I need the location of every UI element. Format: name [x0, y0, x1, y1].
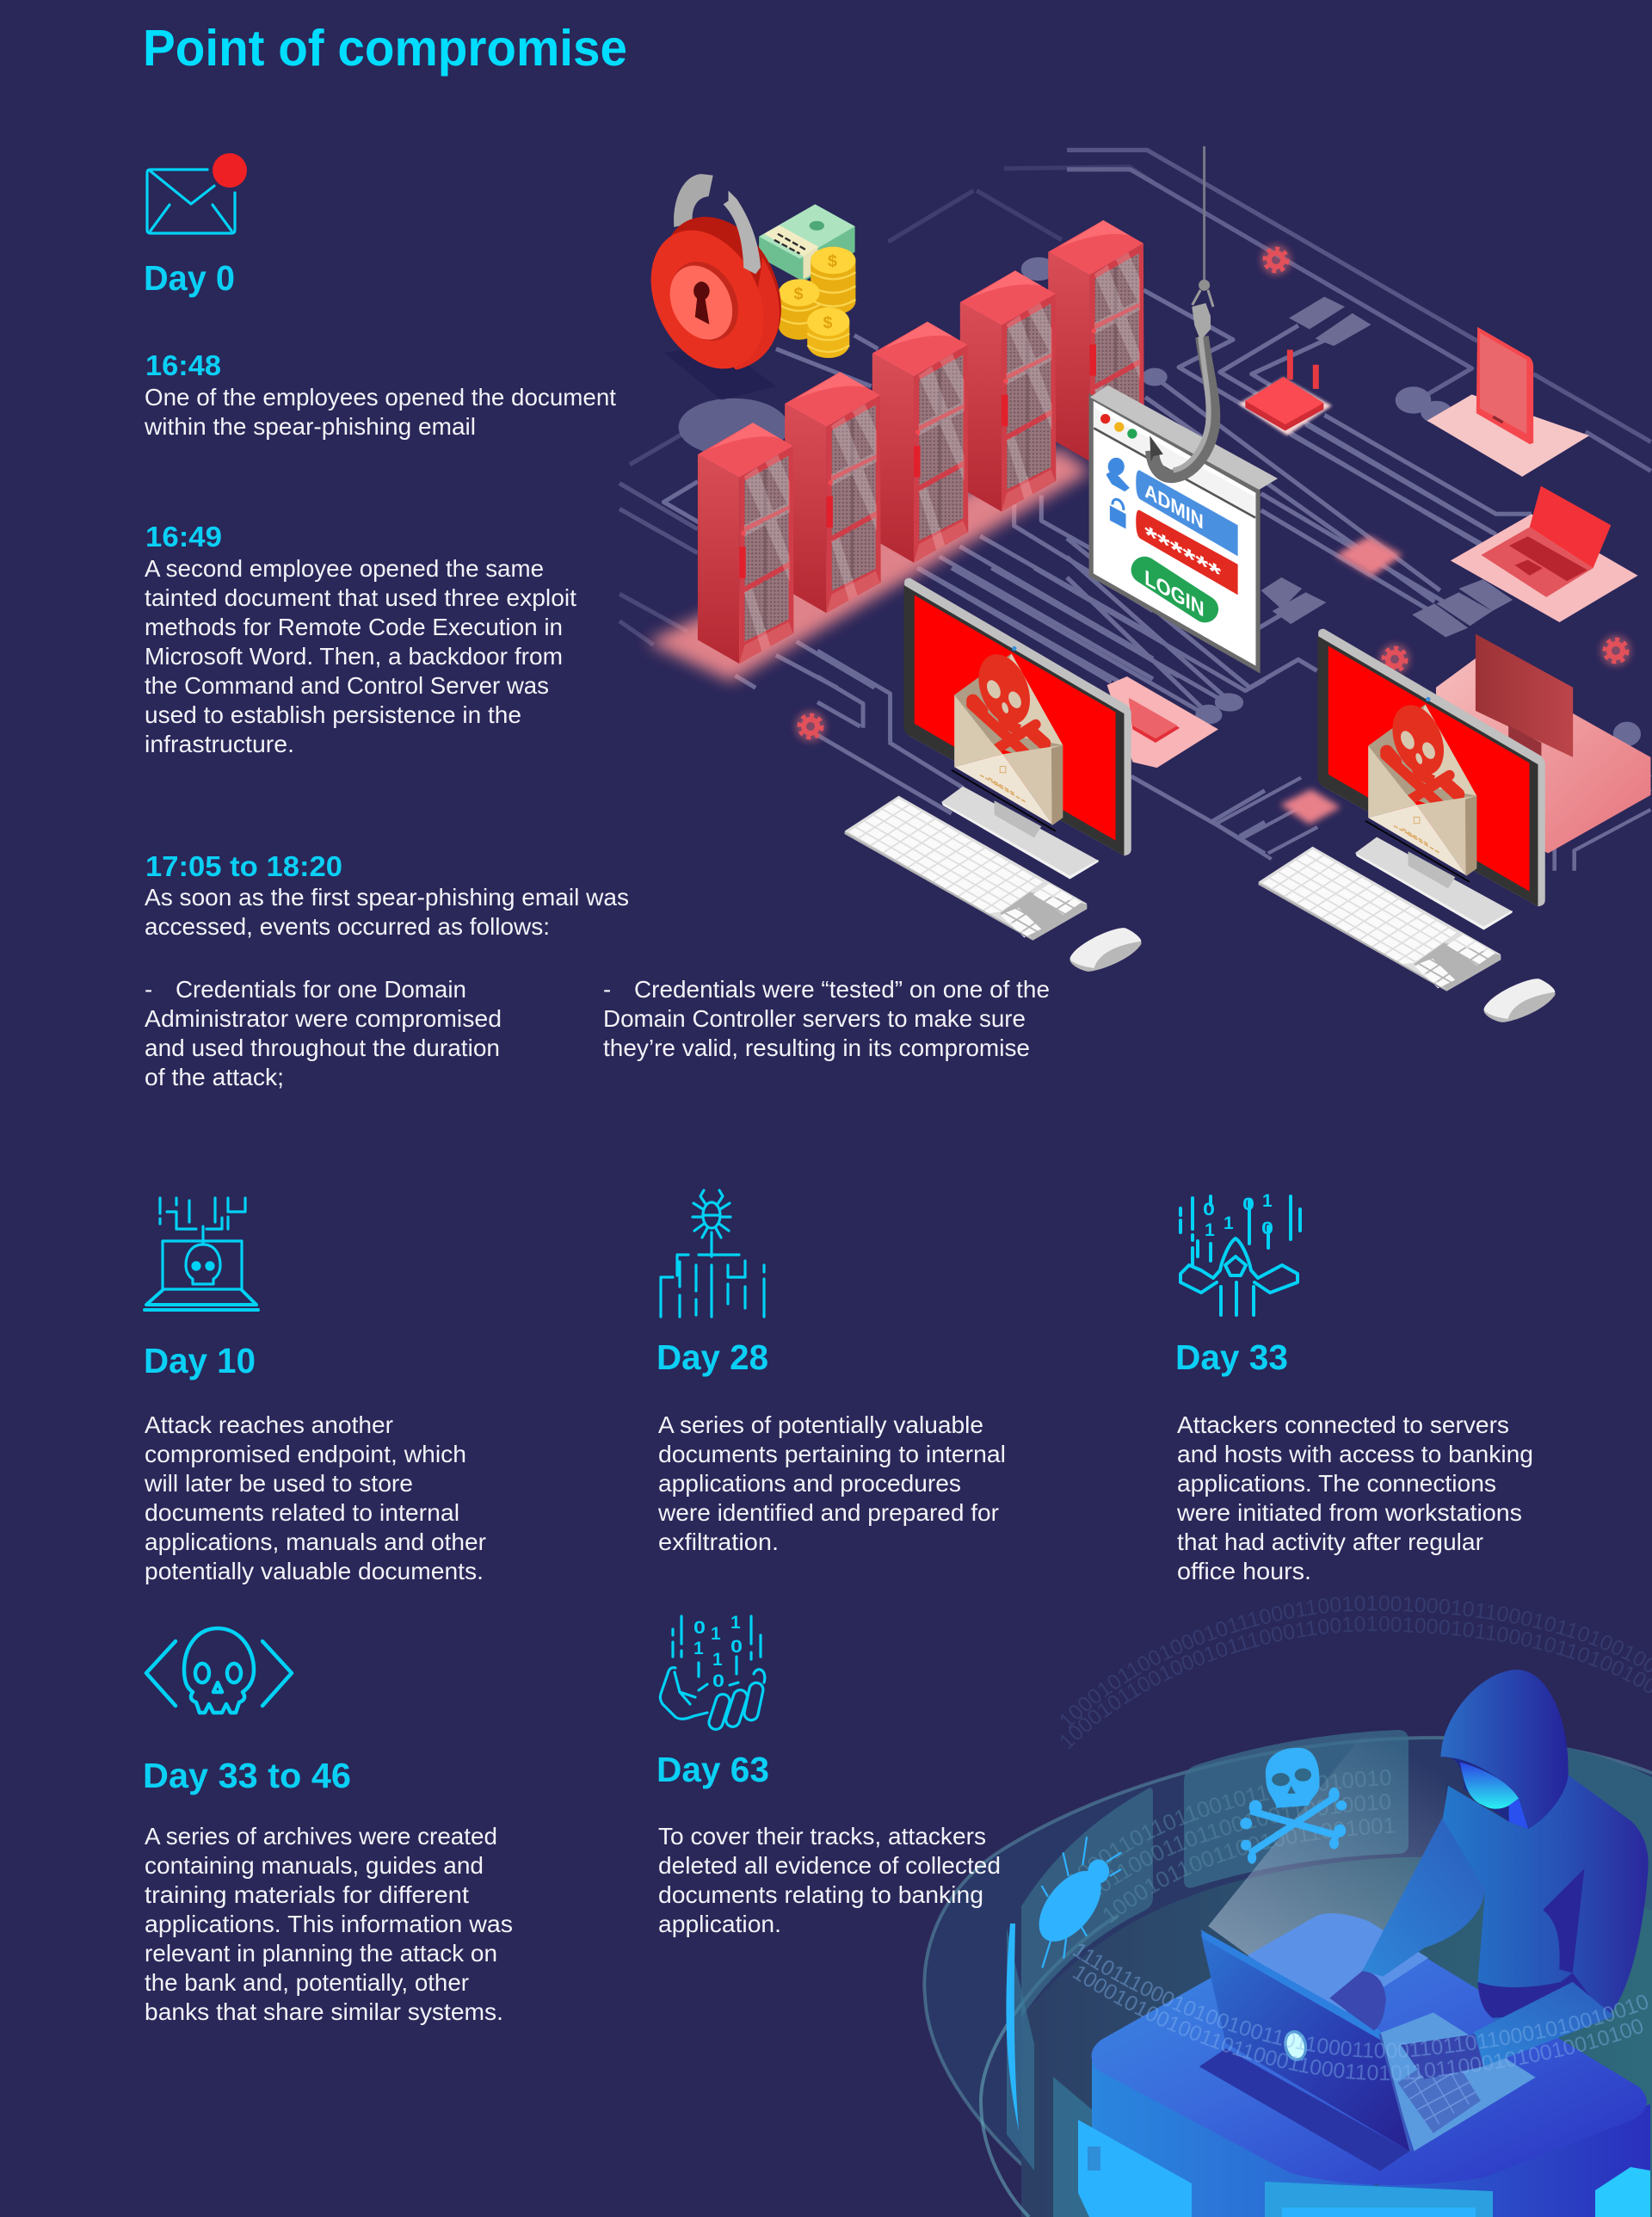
block: 16:48: within the spear-phishing email: [144, 413, 476, 440]
device: small phone on pad: [1107, 676, 1218, 768]
icon: hooded figure with binary: 0: [1261, 1219, 1273, 1238]
binary arcs: lower: 111011100010100100110110001100011011011000101001001011: [1072, 1944, 1649, 2059]
block: Day 10 text: Attack reaches another: [145, 1411, 393, 1438]
heading: Day 10: Day 10: [144, 1341, 256, 1380]
block: Day 10 text: [144, 1411, 486, 1584]
icon: hand holding binary: 1: [730, 1613, 741, 1633]
binary arcs: panels: 1000101100110010011001001: [1103, 1818, 1396, 1923]
left mouse: [1069, 928, 1142, 972]
binary arcs: panels: 0110110001101100100110010010: [1100, 1794, 1390, 1895]
block: Day 63 text: To cover their tracks, attackers: [658, 1823, 986, 1850]
bullet: domain controller: they’re valid, resulting in its compromise: [603, 1034, 1030, 1061]
circuit lines: lower middle: [817, 568, 1265, 854]
block: Day 33 to 46 text: relevant in planning the attack on: [145, 1940, 497, 1967]
circuit lines: lower right: [1216, 724, 1650, 871]
phishing login window: ADMIN: [1144, 479, 1204, 534]
icon: hand holding binary: 1: [711, 1624, 721, 1644]
server racks: [698, 220, 1144, 664]
right keyboard: [1259, 847, 1501, 991]
block: Day 10 text: documents related to internal: [145, 1499, 459, 1526]
heading: Day 33 to 46: Day 33 to 46: [143, 1756, 351, 1795]
block: Day 10 text: will later be used to store: [144, 1470, 413, 1497]
block: Day 28 text: A series of potentially valuable: [658, 1411, 983, 1438]
binary arcs: lower: 100010100100110110001100011010110110001010010010100101: [1072, 1967, 1643, 2081]
block: Day 33 to 46 text: the bank and, potentially, other: [145, 1969, 469, 1996]
bullet: domain controller: -: [603, 976, 611, 1003]
bullet: domain administrator: [145, 976, 502, 1090]
block: Day 28 text: [657, 1411, 1006, 1555]
block: Day 33 text: Attackers connected to servers: [1177, 1411, 1509, 1438]
block: Day 33 text: that had activity after regular: [1177, 1528, 1483, 1555]
bullet: domain administrator: Credentials for one Domain: [176, 976, 466, 1003]
gears: [795, 244, 1631, 742]
block: 16:49: Microsoft Word. Then, a backdoor from: [145, 643, 563, 670]
lower left panels: [1007, 1928, 1093, 2217]
right wall band: [1566, 1747, 1652, 1911]
block: Day 10 text: compromised endpoint, which: [145, 1441, 466, 1467]
laptop: [1199, 1930, 1536, 2171]
block: Day 33 text: and hosts with access to banking: [1177, 1441, 1533, 1467]
left keyboard: [845, 796, 1087, 941]
binary arcs: upper: [1060, 1596, 1652, 1749]
skull panel: [1184, 1730, 1409, 1887]
bug icon: [1026, 1837, 1121, 1967]
heading: Day 63: Day 63: [656, 1750, 769, 1789]
skull and crossbones: [1240, 1748, 1347, 1864]
block: 16:49: methods for Remote Code Execution in: [145, 614, 563, 640]
device: desktop on pad: [1436, 634, 1650, 853]
device: router: [1239, 349, 1332, 435]
icon: hand holding binary: 0: [730, 1637, 743, 1657]
bullet: domain controller: Domain Controller servers to make sure: [603, 1005, 1026, 1032]
icon: hooded figure with binary: 1: [1262, 1191, 1273, 1211]
block: Day 63 text: application.: [658, 1911, 781, 1937]
block: 16:48: [144, 349, 616, 440]
pink circuit nodes: [1280, 536, 1402, 824]
light sliver: [1006, 1924, 1019, 2131]
block: Day 33 to 46 text: banks that share similar systems.: [145, 1998, 503, 2025]
binary arcs: panels: 1000110110110010110110010010: [1069, 1769, 1390, 1876]
icon: hand holding binary: [660, 1613, 765, 1731]
phishing login window: [1090, 386, 1278, 670]
block: Day 33 text: were initiated from workstations: [1176, 1499, 1522, 1526]
icon: laptop with skull: [145, 1198, 258, 1310]
block: Day 33 to 46 text: containing manuals, guides and: [145, 1852, 484, 1879]
block: Day 10 text: applications, manuals and other: [145, 1528, 486, 1555]
right mouse: [1483, 979, 1556, 1022]
icon: skull in code brackets: [146, 1628, 292, 1713]
bug panel: [1021, 1788, 1153, 2018]
icon: hooded figure with binary: [1180, 1191, 1300, 1315]
block: 17:05 to 18:20: [145, 850, 629, 940]
money and coins: $: [823, 313, 832, 332]
floor disc: [1021, 1857, 1652, 2217]
block: Day 33 text: office hours.: [1177, 1558, 1311, 1584]
phishing login window: LOGIN: [1144, 565, 1205, 622]
outer holographic ring: [924, 1738, 1652, 2217]
icon: hooded figure with binary: 1: [1224, 1213, 1234, 1233]
block: 16:49: [145, 521, 576, 757]
icon: hand holding binary: 0: [693, 1618, 706, 1638]
block: Day 28 text: exfiltration.: [658, 1528, 779, 1555]
block: Day 33 to 46 text: A series of archives were created: [145, 1823, 497, 1850]
icon: hand holding binary: 1: [693, 1639, 704, 1658]
block: 16:48: One of the employees opened the document: [145, 384, 616, 411]
left monitor with skull email: [903, 578, 1131, 879]
icon: hand holding binary: 1: [712, 1650, 723, 1670]
device: laptop on pad: [1451, 486, 1638, 622]
block: Day 28 text: documents pertaining to internal: [658, 1441, 1006, 1467]
icon: bug with circuit: [661, 1190, 764, 1317]
block: Day 33 to 46 text: training materials for different: [145, 1881, 469, 1908]
block: Day 28 text: were identified and prepared for: [657, 1499, 999, 1526]
block: Day 33 to 46 text: applications. This information was: [145, 1911, 513, 1937]
block: 17:05 to 18:20: 17:05 to 18:20: [145, 850, 342, 882]
bullet: domain administrator: -: [145, 976, 152, 1003]
money and coins: [759, 204, 855, 358]
icon: envelope with alert: [147, 153, 247, 233]
icon: hooded figure with binary: 1: [1205, 1220, 1215, 1240]
light cone from laptop: [1208, 1717, 1446, 1959]
circuit chips: [1261, 297, 1513, 637]
device: tablet on pad: [1427, 327, 1589, 477]
block: Day 33 text: [1176, 1411, 1533, 1584]
block: Day 10 text: potentially valuable documents.: [145, 1558, 484, 1584]
money and coins: $: [793, 285, 803, 304]
heading: Day 33: Day 33: [1175, 1337, 1288, 1377]
block: Day 63 text: deleted all evidence of collected: [658, 1852, 1001, 1879]
circuit lines: upper left: [620, 167, 1153, 688]
block: Day 33 to 46 text: [145, 1823, 513, 2025]
icon: hand holding binary: 0: [712, 1671, 724, 1691]
block: 16:49: the Command and Control Server was: [145, 672, 549, 699]
heading: Day 0: Day 0: [144, 258, 235, 298]
bullet: domain administrator: Administrator were compromised: [145, 1005, 502, 1032]
block: 17:05 to 18:20: As soon as the first spear-phishing email was: [145, 884, 629, 911]
heading: Day 28: Day 28: [656, 1337, 768, 1377]
circuit lines: upper right: [1067, 150, 1651, 722]
bullet: domain controller: Credentials were “tested” on one of the: [634, 976, 1050, 1003]
fishing line and hook: [1150, 146, 1213, 476]
bullet: domain administrator: and used throughout the duration: [145, 1034, 500, 1061]
hacker figure: [1329, 1670, 1649, 2079]
icon: hooded figure with binary: 0: [1242, 1195, 1254, 1214]
block: 16:49: used to establish persistence in the: [145, 701, 521, 728]
block: Day 33 text: applications. The connections: [1177, 1470, 1496, 1497]
block: 16:49: infrastructure.: [145, 731, 294, 757]
block: 16:49: A second employee opened the same: [145, 555, 544, 582]
bullet: domain controller: [603, 976, 1050, 1061]
block: Day 28 text: applications and procedures: [658, 1470, 961, 1497]
icon: hooded figure with binary: 0: [1203, 1200, 1215, 1220]
glow pad under server racks: [647, 448, 1091, 682]
desk: [1078, 1913, 1650, 2217]
money and coins: $: [828, 252, 837, 271]
binary arcs: upper: 1000101100100010111000110010100100010110001011010010010100110: [1060, 1596, 1652, 1728]
illustration: compromised network: [620, 146, 1651, 1022]
inner ring: [981, 1915, 1119, 2217]
bullet: domain administrator: of the attack;: [145, 1064, 284, 1090]
broken padlock: [629, 174, 804, 400]
block: 16:49: 16:49: [145, 521, 222, 553]
block: 17:05 to 18:20: accessed, events occurred as follows:: [145, 913, 550, 940]
block: 16:48: 16:48: [145, 349, 221, 381]
binary arcs: upper: 1000101100100010111000110010100100010110001011010010010100110: [1060, 1616, 1652, 1749]
block: Day 63 text: documents relating to banking: [658, 1881, 983, 1908]
phishing login window: ******: [1144, 519, 1221, 590]
title: Point of compromise: [143, 20, 627, 77]
block: 16:49: tainted document that used three exploit: [145, 584, 576, 611]
block: Day 63 text: [658, 1823, 1001, 1937]
right monitor with skull email: [1317, 629, 1545, 929]
